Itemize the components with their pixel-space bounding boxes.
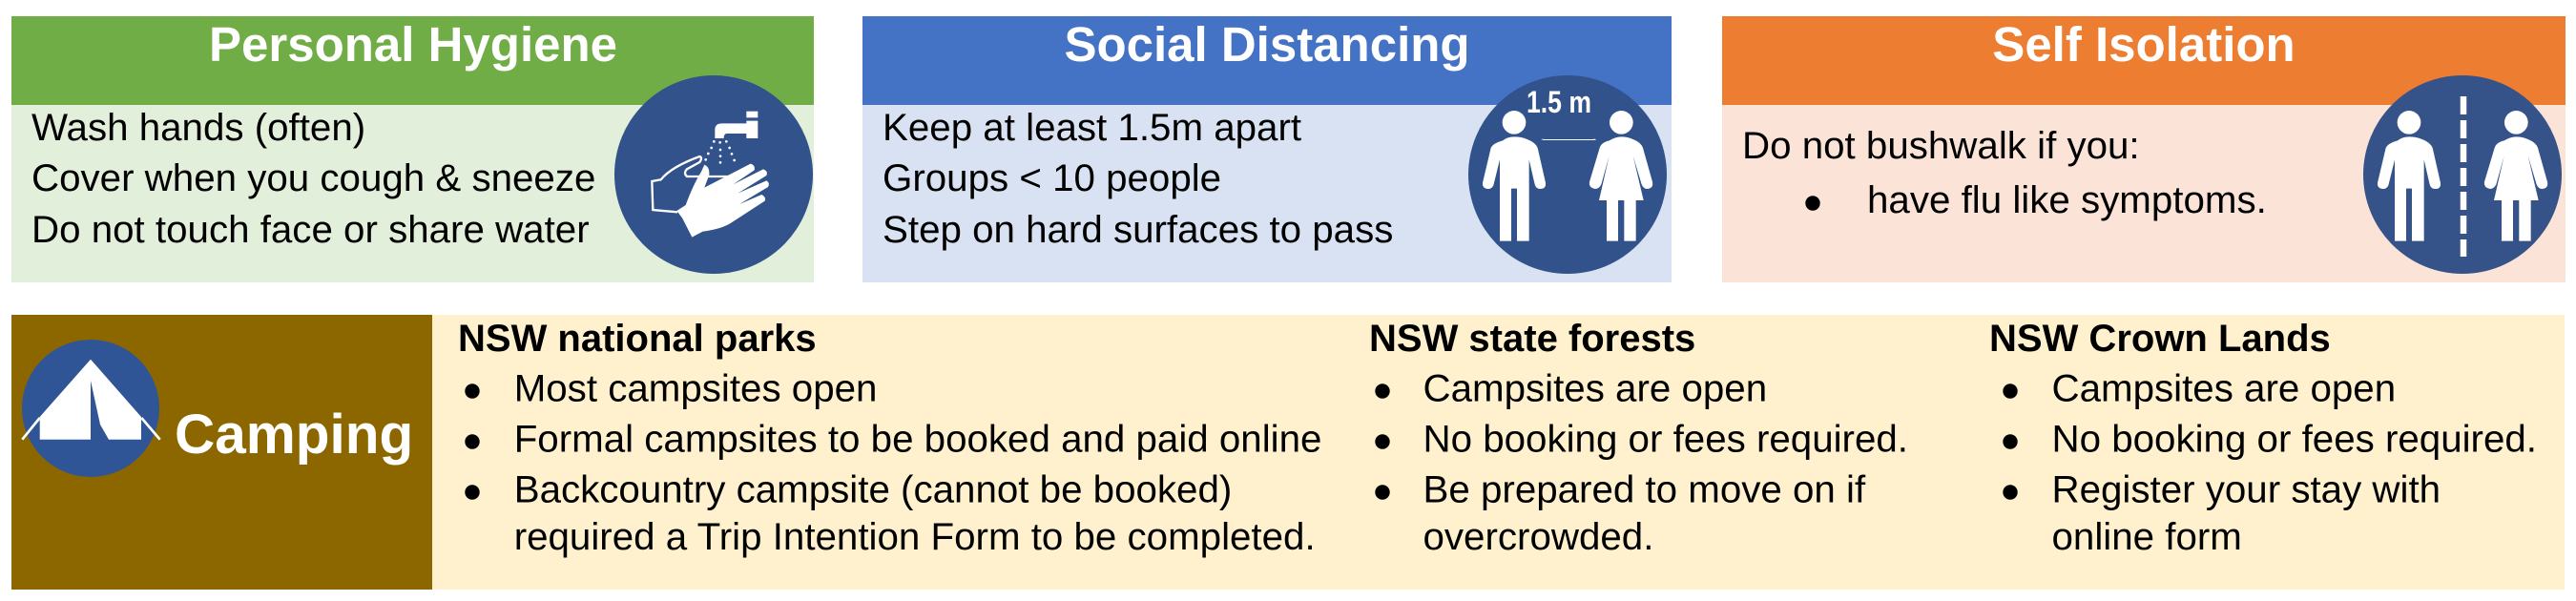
column: NSW Crown Lands: Campsites are open [2051,366,2396,410]
text: self isolation advice [1742,124,2267,221]
panel: camping [11,315,2565,590]
column: NSW national parks [458,318,1321,558]
panel: personal hygiene [11,16,814,282]
text: self isolation advice: Do not bushwalk if you: [1742,124,2140,167]
panel: social distancing [862,16,1672,282]
column: NSW Crown Lands [1989,318,2537,558]
column: NSW state forests: Campsites are open [1423,366,1767,410]
text: hygiene advice: Cover when you cough & sneeze [31,156,595,199]
text: distancing advice [883,106,1393,251]
column: NSW national parks: Formal campsites to be booked and paid online [514,418,1321,460]
column: NSW Crown Lands: online form [2051,515,2242,558]
icon: two people 1.5 m apart: 1.5 m [1527,85,1591,119]
icon: hand washing [614,75,813,274]
text: distancing advice: Step on hard surfaces to pass [883,208,1393,251]
text: hygiene advice [31,106,595,251]
text: self isolation advice: have flu like symptoms. [1867,178,2267,221]
column: NSW national parks: required a Trip Intention Form to be completed. [514,515,1316,558]
heading: camping: Camping [175,404,413,466]
column: NSW national parks: Most campsites open [514,366,877,410]
column: NSW national parks: Backcountry campsite (cannot be booked) [514,467,1232,511]
column: NSW national parks: NSW national parks [458,318,817,360]
column: NSW state forests: No booking or fees required. [1423,418,1908,460]
panel: camping label [11,315,432,590]
column: NSW state forests: overcrowded. [1423,515,1653,558]
panel: self isolation [1722,16,2566,282]
column: NSW state forests: Be prepared to move on if [1423,467,1866,511]
column: NSW state forests [1369,318,1908,558]
column: NSW Crown Lands: NSW Crown Lands [1989,318,2331,360]
heading: social distancing: Social Distancing [1064,17,1470,72]
text: hygiene advice: Wash hands (often) [31,106,365,149]
text: distancing advice: Groups < 10 people [883,156,1221,199]
text: hygiene advice: Do not touch face or share water [31,208,590,251]
text: distancing advice: Keep at least 1.5m apart [883,106,1301,149]
icon: two people 1.5 m apart [1468,75,1667,274]
column: NSW Crown Lands: No booking or fees required. [2051,418,2537,460]
heading: personal hygiene: Personal Hygiene [209,17,617,72]
heading: self isolation: Self Isolation [1992,17,2296,72]
icon: two people separated by dashed line [2363,75,2562,274]
column: NSW state forests: NSW state forests [1369,318,1695,360]
column: NSW Crown Lands: Register your stay with [2051,467,2441,511]
icon: tent [22,340,160,477]
